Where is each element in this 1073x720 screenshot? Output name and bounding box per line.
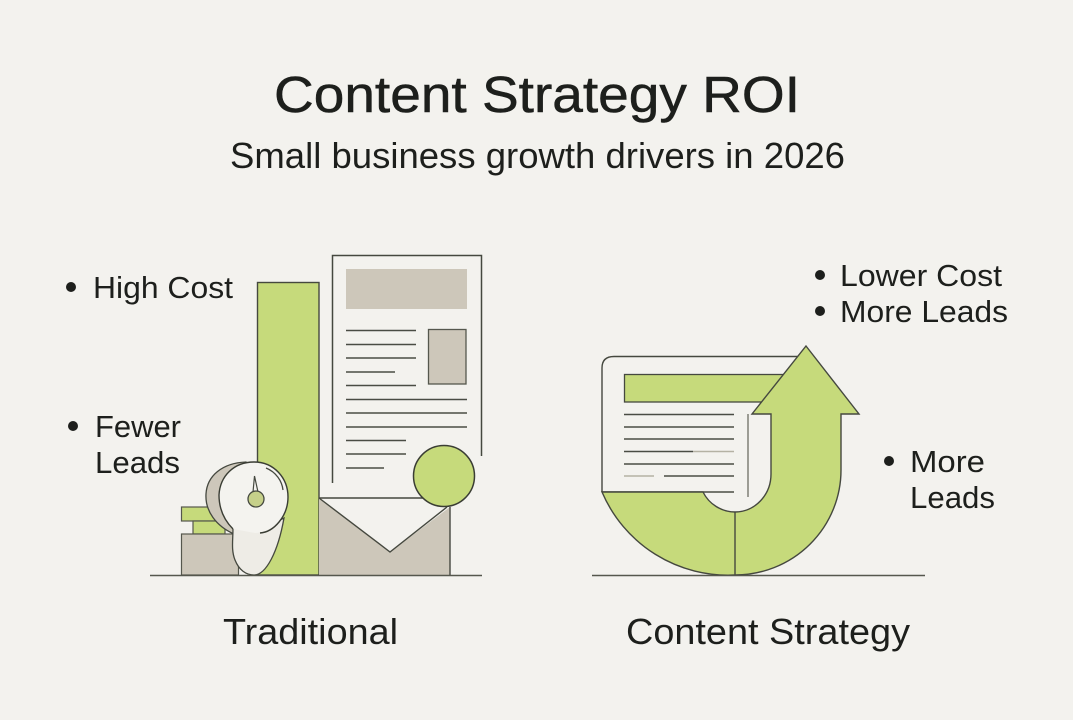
subtitle: Small business growth drivers in 2026 <box>230 135 845 176</box>
callout: more leads: Leads <box>910 480 995 515</box>
label: content strategy: Content Strategy <box>626 611 910 652</box>
icon: green circle <box>414 446 474 506</box>
icon: printed document <box>332 256 482 483</box>
callout: fewer leads <box>68 409 181 480</box>
callout: lower cost and more leads <box>815 258 1008 329</box>
callout: high cost: High Cost <box>93 270 233 305</box>
ground line <box>592 574 925 576</box>
callout: fewer leads: Fewer <box>95 409 181 444</box>
arrow divider line <box>734 512 736 575</box>
icon: envelope <box>319 498 450 575</box>
callout: lower cost and more leads: Lower Cost <box>840 258 1002 293</box>
arrow: growth U-turn arrow <box>602 346 859 575</box>
icon: content card <box>602 356 800 497</box>
icon: gauge <box>206 462 288 575</box>
bar: tall green column <box>258 282 319 575</box>
label: traditional: Traditional <box>223 611 398 652</box>
panel: content strategy illustration <box>592 346 925 576</box>
ground line <box>150 574 482 576</box>
panel: traditional illustration <box>150 256 482 576</box>
callout: lower cost and more leads: More Leads <box>840 294 1008 329</box>
callout: more leads: More <box>910 444 985 479</box>
title: Content Strategy ROI <box>274 66 800 123</box>
icon: stacked blocks <box>182 507 238 575</box>
callout: fewer leads: Leads <box>95 445 180 480</box>
callout: more leads <box>884 444 995 515</box>
